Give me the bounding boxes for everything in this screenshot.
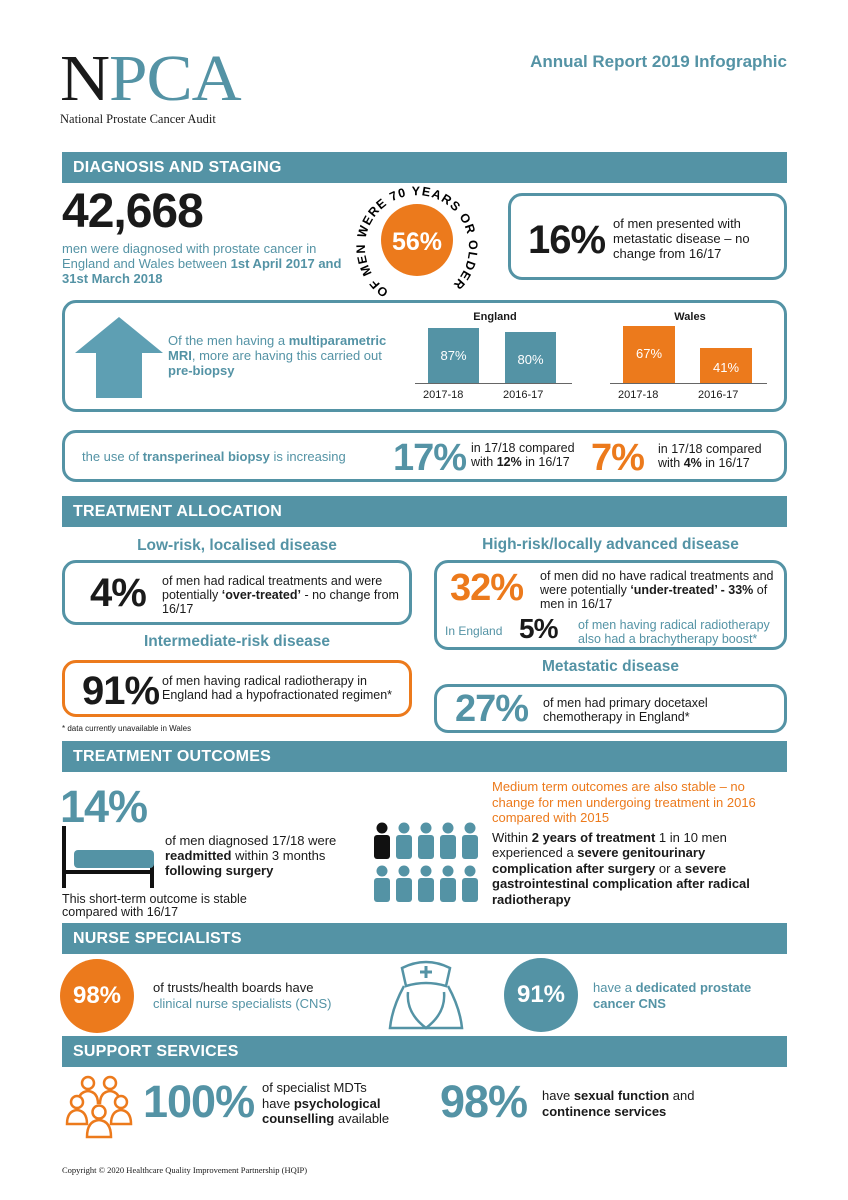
section: treatment allocation (62, 496, 787, 527)
section: diagnosis and staging: DIAGNOSIS AND STAGING (73, 159, 282, 176)
box: 27% (434, 684, 787, 733)
logo: NPCA (60, 42, 241, 115)
box: MRI: Of the men having a multiparametric MRI, more are having this carried out pre-biopsy (168, 333, 386, 378)
circle: 98%: 98% (73, 982, 121, 1009)
chart: England: 80% (517, 352, 544, 367)
box: 91%: of men having radical radiotherapy in England had a hypofractionated regimen* (162, 674, 392, 702)
section: treatment outcomes: TREATMENT OUTCOMES (73, 748, 271, 765)
box: 16% metastatic (508, 193, 787, 280)
box: 32%: In England (445, 624, 502, 638)
report title: Annual Report 2019 Infographic (530, 52, 787, 71)
circle: 91%: 91% (517, 981, 565, 1008)
stat: 42,668 (62, 185, 341, 286)
section: support services (62, 1036, 787, 1067)
icon: people 1 in 10 (374, 822, 478, 902)
icon: bed (62, 826, 154, 888)
heading: intermediate: Intermediate-risk disease (144, 633, 330, 650)
text: of specialist MDTs (262, 1080, 367, 1095)
box: 4%: of men had radical treatments and were potentially ‘over-treated’ - no change from 16/17 (162, 574, 399, 616)
text: medium term outcomes (492, 779, 756, 906)
icon: group (66, 1076, 132, 1138)
section: nurse specialists: NURSE SPECIALISTS (73, 930, 242, 947)
text: continence services (542, 1104, 666, 1118)
chart: England: 87% (440, 348, 467, 363)
circle: 98% (60, 959, 134, 1033)
chart: Wales: 41% (713, 360, 739, 375)
box: 4%: 4% (90, 571, 146, 615)
box: 27%: 27% (455, 688, 528, 730)
stat: 98%: 98% (440, 1076, 527, 1127)
section: nurse specialists (62, 923, 787, 954)
stat: 42,668: men were diagnosed with prostate cancer in England and Wales between 1st April 2017 and 31st March 2018 (62, 241, 341, 286)
chart: England: England (473, 311, 517, 323)
text: have psychological (262, 1096, 381, 1110)
box: 32%: of men having radical radiotherapy also had a brachytherapy boost* (578, 618, 770, 646)
heading: metastatic: Metastatic disease (542, 658, 679, 675)
box: 16% metastatic: 16% (528, 218, 605, 262)
text: medium term outcomes: Medium term outcomes are also stable – no change for men undergoing treatment in 2016 compared with 2015 (492, 779, 756, 825)
box: 32% (434, 560, 787, 650)
icon: nurse (388, 960, 464, 1030)
icon: up arrow (75, 317, 163, 398)
box: transperineal biopsy: in 17/18 compared (471, 441, 575, 455)
chart: England: 2016-17 (503, 389, 543, 401)
section: diagnosis and staging (62, 152, 787, 183)
text: clinical nurse specialists (CNS) (153, 996, 331, 1011)
circle: 56%: OF MEN WERE 70 YEARS OR OLDER (356, 186, 478, 296)
box: transperineal biopsy: with 12% in 16/17 (471, 455, 570, 469)
box: transperineal biopsy (62, 430, 787, 482)
chart: England: 2017-18 (423, 389, 463, 401)
chart: Wales: 2017-18 (618, 389, 658, 401)
text: compared with 16/17 (62, 905, 178, 919)
box: transperineal biopsy: 7% (591, 437, 644, 479)
chart: Wales: 2016-17 (698, 389, 738, 401)
text: counselling available (262, 1111, 389, 1126)
text: This short-term outcome is stable (62, 892, 247, 906)
box: 32%: of men did no have radical treatments and were potentially ‘under-treated’ - 33% of men in 16/17 (540, 569, 773, 611)
box: 91%: 91% (82, 669, 159, 713)
box: transperineal biopsy: 17% (393, 437, 466, 479)
box: 32%: 5% (519, 613, 557, 644)
stat: 14%: 14% (60, 781, 147, 832)
box: 27%: of men had primary docetaxel (543, 696, 708, 710)
stat: 100%: 100% (143, 1076, 254, 1127)
footnote: * data currently unavailable in Wales (62, 724, 191, 733)
box: 16% metastatic: of men presented with metastatic disease – no change from 16/17 (613, 216, 750, 261)
text: of men diagnosed 17/18 were (165, 833, 336, 848)
heading: low-risk: Low-risk, localised disease (137, 537, 337, 554)
box: transperineal biopsy: the use of transperineal biopsy is increasing (82, 449, 346, 464)
text: following surgery (165, 863, 273, 878)
chart: Wales (610, 311, 767, 401)
text: medium term outcomes: Within 2 years of treatment 1 in 10 men experienced a severe genitourinary complication after surgery or a severe gastrointestinal complication after radical radiotherapy (492, 830, 750, 906)
heading: high-risk: High-risk/locally advanced disease (482, 536, 739, 553)
box: transperineal biopsy: with 4% in 16/17 (658, 456, 750, 470)
box: 4% (62, 560, 412, 625)
text: have sexual function and (542, 1088, 694, 1103)
box: 91% (62, 660, 412, 717)
text: of trusts/health boards have (153, 980, 313, 995)
circle: 56%: 56% (392, 228, 442, 256)
box: 27%: chemotherapy in England* (543, 710, 690, 724)
circle: 91% (504, 958, 578, 1032)
chart: Wales: 67% (636, 346, 662, 361)
box: MRI (62, 300, 787, 412)
section: support services: SUPPORT SERVICES (73, 1043, 239, 1060)
section: treatment outcomes (62, 741, 787, 772)
copyright: Copyright © 2020 Healthcare Quality Improvement Partnership (HQIP) (62, 1165, 307, 1175)
text: readmitted within 3 months (165, 848, 325, 863)
stat: 42,668: 42,668 (62, 185, 203, 238)
chart: Wales: Wales (674, 311, 706, 323)
logo: National Prostate Cancer Audit (60, 112, 216, 126)
box: 32%: 32% (450, 567, 523, 609)
text: cancer CNS (593, 996, 666, 1011)
section: treatment allocation: TREATMENT ALLOCATION (73, 503, 282, 520)
text: have a dedicated prostate (593, 980, 751, 995)
box: transperineal biopsy: in 17/18 compared (658, 442, 762, 456)
chart: England (415, 311, 572, 401)
